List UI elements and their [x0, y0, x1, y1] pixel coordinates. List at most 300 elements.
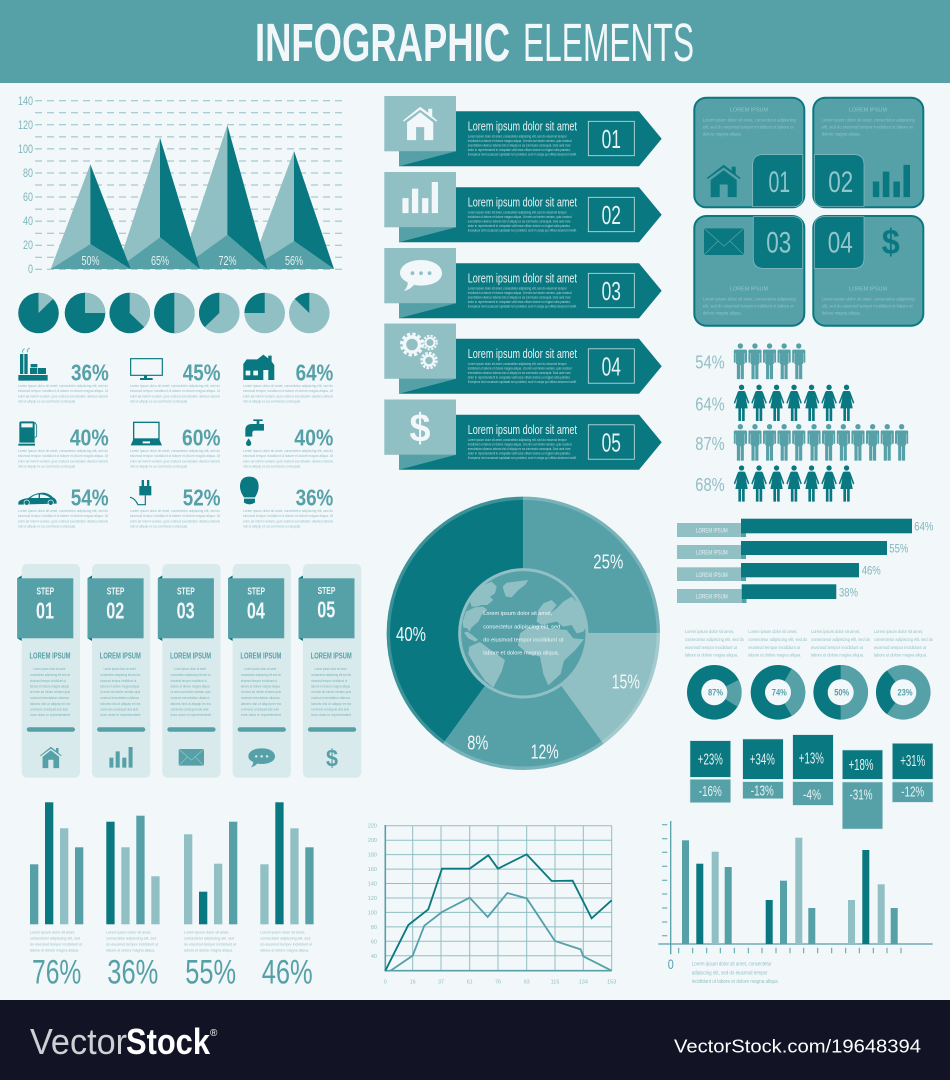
footer logo: Vector: [30, 1021, 127, 1062]
tile 04: 04: [828, 227, 853, 260]
donut captions: Lorem ipsum dolor sit amet,: [811, 629, 860, 634]
bar group 76%: consectetur adipiscing elit, sed: [30, 935, 80, 940]
icon: speech bubble: [400, 260, 442, 291]
icon: bars: [873, 165, 910, 197]
box column 3: +13%: [799, 751, 824, 768]
step card 03: ut enim ad minim veniam quis: [171, 690, 211, 694]
icon: bars: [402, 182, 438, 213]
icon: monitor: [131, 359, 162, 380]
row 64% women: 64%: [695, 393, 725, 414]
plus minus boxes: [690, 735, 933, 829]
stat 52%: [130, 485, 220, 528]
banner 01: exercitation ullamco laboris nisi ut aliquip ex ea commodo consequat. Duis aute irure: [468, 144, 571, 148]
chart caption: adipiscing elit, sed do eiusmod tempor: [692, 970, 768, 976]
box column 4: [842, 750, 883, 829]
step card 05: eiusmod tempor incididunt ut: [311, 679, 347, 683]
footer logo: Stock: [126, 1021, 211, 1062]
banner 03: dolor in reprehenderit in voluptate velit esse cillum dolore eu fugiat nulla pariatur.: [468, 300, 571, 304]
bar 55%: [677, 541, 909, 559]
footer image id: VectorStock.com/19648394: [674, 1035, 921, 1056]
tile 02: dolore magna aliqua.: [822, 132, 861, 137]
globe text: consectetur adipiscing elit, sed: [483, 624, 560, 630]
bar group 76%: 76%: [32, 954, 81, 992]
y axis values: [368, 824, 377, 960]
x axis values: 134: [579, 979, 588, 985]
stat 40%: 40%: [70, 425, 109, 451]
tile 02: LOREM IPSUM: [849, 108, 887, 114]
x axis values: 76: [495, 979, 501, 985]
banner 03: Excepteur sint occaecat cupidatat non proident, sunt in culpa qui officia deserunt mollit.: [468, 304, 577, 308]
row 87% men: [695, 424, 908, 461]
stat 40% tap: Lorem ipsum dolor sit amet, consectetur adipiscing elit, sed do: [243, 449, 333, 453]
stat 64%: 64%: [296, 360, 333, 386]
banner 03: Lorem ipsum dolor sit amet, consectetur adipiscing elit, sed do eiusmod tempor: [468, 286, 567, 290]
step card 03: laboris nisi ut aliquip ex ea: [171, 702, 211, 706]
step card 04: commodo consequat duis aute: [241, 708, 279, 712]
pyramid 4: [250, 151, 334, 269]
step card 03: STEP: [177, 587, 195, 598]
banner 03: Lorem ipsum dolor sit amet: [468, 271, 577, 285]
tile 03: elit, sed do eiusmod tempor incididunt ut labore et: [703, 304, 794, 308]
pyramid 3: [180, 125, 267, 269]
donut captions: consectetur adipiscing elit, sed do: [685, 637, 744, 642]
tile 04: dolore magna aliqua.: [822, 310, 861, 316]
donut captions: labore et dolore magna aliqua.: [874, 653, 927, 658]
donut charts with captions: [685, 629, 933, 720]
donut captions: Lorem ipsum dolor sit amet,: [874, 629, 923, 634]
stat 36% bulb: [243, 485, 333, 528]
tile 04: elit, sed do eiusmod tempor incididunt ut labore et: [822, 304, 913, 308]
step card 03: Lorem ipsum dolor sit amet: [174, 667, 206, 671]
icon: bars: [109, 747, 133, 768]
bar group 36%: 36%: [107, 954, 158, 992]
step card 03: eiusmod tempor incididunt ut: [171, 679, 207, 683]
row 54% men: [695, 343, 805, 379]
icon: house with windows: [243, 355, 274, 380]
stat 45%: enim ad minim veniam, quis nostrud exercitation ullamco laboris: [130, 394, 220, 398]
pie 1: [18, 293, 59, 333]
banner 01: dolor in reprehenderit in voluptate velit esse cillum dolore eu fugiat nulla pariatur.: [468, 148, 571, 152]
zero label: 0: [668, 956, 674, 972]
row 54% men: 54%: [695, 351, 725, 372]
bar 64%: [677, 519, 934, 537]
stat 52%: 52%: [183, 485, 220, 511]
y axis labels: 0: [28, 262, 33, 276]
banner 05: Lorem ipsum dolor sit amet: [468, 423, 577, 437]
line chart: [368, 824, 616, 985]
step card 02: laboris nisi ut aliquip ex ea: [100, 702, 141, 706]
banner 05: Lorem ipsum dolor sit amet, consectetur adipiscing elit, sed do eiusmod tempor: [468, 438, 567, 442]
step card 02: eiusmod tempor incididunt ut: [100, 679, 136, 683]
step card 01: LOREM IPSUM: [30, 651, 70, 661]
donut captions: consectetur adipiscing elit, sed do: [748, 637, 808, 642]
y axis values: 160: [368, 867, 377, 873]
pie percentages: 25%: [593, 551, 623, 573]
stat 40%: eiusmod tempor incididunt ut labore et dolore magna aliqua. Ut: [18, 454, 108, 458]
stat 64%: [243, 360, 333, 404]
x axis values: 153: [607, 979, 616, 985]
donut captions: eiusmod tempor incididunt ut: [685, 645, 738, 650]
bar 38%: [677, 584, 858, 603]
step card 01: irure dolor in reprehenderit: [30, 713, 70, 717]
row 87% men: 87%: [695, 433, 725, 454]
x axis values: [384, 979, 616, 985]
banner 04: [384, 324, 662, 394]
box column 2: -13%: [751, 782, 774, 799]
step card 04: labore et dolore magna aliqua: [241, 684, 280, 688]
pyramid chart: [18, 94, 345, 276]
globe text: Lorem ipsum dolor sit amet,: [483, 611, 553, 617]
donut 50%: [813, 665, 868, 720]
tile 03: LOREM IPSUM: [730, 287, 768, 293]
footer logo: [30, 1021, 218, 1062]
banner 01: Lorem ipsum dolor sit amet, consectetur adipiscing elit, sed do eiusmod tempor: [468, 134, 567, 138]
stat 45%: nisi ut aliquip ex ea commodo consequat.: [130, 400, 188, 404]
step card 02: ut enim ad minim veniam quis: [100, 690, 141, 694]
stat 45%: 45%: [183, 360, 220, 386]
y axis values: 200: [368, 838, 377, 844]
step cards: [17, 564, 361, 778]
step card 05: consectetur adipiscing elit sed do: [311, 673, 351, 677]
step card 01: commodo consequat duis aute: [30, 708, 68, 712]
bar group 55%: 55%: [185, 954, 236, 992]
step card 01: labore et dolore magna aliqua: [30, 684, 69, 688]
bars first group: [682, 840, 732, 944]
banner 02: Lorem ipsum dolor sit amet: [468, 195, 577, 209]
banner 01: 01: [602, 124, 621, 154]
title: INFOGRAPHIC: [255, 13, 510, 73]
step card 01: nostrud exercitation ullamco: [30, 696, 69, 700]
banner 02: incididunt ut labore et dolore magna aliqua. Ut enim ad minim veniam, quis nostrud: [468, 215, 572, 219]
horizontal ribbon bars: [677, 519, 934, 603]
bar group 46%: consectetur adipiscing elit, sed: [260, 935, 310, 940]
step card 04: eiusmod tempor incididunt ut: [241, 679, 277, 683]
bar group 55%: labore et dolore magna aliqua.: [184, 948, 233, 953]
bar group 76%: Lorem ipsum dolor sit amet,: [30, 929, 75, 934]
step card 04: ut enim ad minim veniam quis: [241, 690, 281, 694]
stat 52%: eiusmod tempor incididunt ut labore et dolore magna aliqua. Ut: [130, 514, 220, 518]
step card 04: irure dolor in reprehenderit: [241, 713, 281, 717]
box column 3: -4%: [803, 786, 821, 803]
chart caption: Lorem ipsum dolor sit amet, consectetur: [692, 962, 772, 968]
stat 52%: enim ad minim veniam, quis nostrud exercitation ullamco laboris: [130, 520, 220, 524]
tile 01: [694, 98, 804, 207]
bars second group: [766, 838, 815, 944]
icon: laptop: [131, 422, 162, 445]
step card 05: [298, 564, 361, 778]
donut captions: consectetur adipiscing elit, sed do: [811, 637, 870, 642]
bar group 76%: [30, 802, 83, 992]
stat 36%: enim ad minim veniam, quis nostrud exercitation ullamco laboris: [18, 394, 108, 398]
stat 45%: [130, 360, 220, 404]
icon: factory: [18, 348, 48, 381]
step card 05: laboris nisi ut aliquip ex ea: [311, 702, 351, 706]
y axis values: 40: [371, 954, 377, 960]
donut captions: Lorem ipsum dolor sit amet,: [748, 629, 797, 634]
pyramid 1: [51, 164, 131, 269]
step card 01: STEP: [36, 587, 54, 598]
box column 5: +31%: [900, 753, 925, 770]
y axis labels: 120: [18, 118, 33, 132]
tile 03: Lorem ipsum dolor sit amet, consectetur adipiscing: [703, 296, 796, 302]
bar 64%: 64%: [914, 519, 934, 533]
x axis values: 93: [524, 979, 530, 985]
pyramid percentages: 72%: [218, 254, 236, 268]
banner 03: exercitation ullamco laboris nisi ut aliquip ex ea commodo consequat. Duis aute irure: [468, 296, 571, 300]
tile 02: Lorem ipsum dolor sit amet, consectetur adipiscing: [822, 118, 915, 122]
stat 40%: [18, 425, 109, 468]
banner 05: Excepteur sint occaecat cupidatat non proident, sunt in culpa qui officia deserunt mollit.: [468, 456, 577, 460]
rounded tiles: [694, 98, 923, 326]
tile 04: Lorem ipsum dolor sit amet, consectetur adipiscing: [822, 296, 915, 302]
pyramid percentages: 56%: [285, 254, 303, 268]
banner 01: [384, 96, 662, 166]
donut captions: [685, 629, 933, 658]
icon: speech bubble: [248, 748, 275, 767]
banner 01: Excepteur sint occaecat cupidatat non proident, sunt in culpa qui officia deserunt mollit.: [468, 152, 577, 156]
bar group 46%: do eiusmod tempor incididunt ut: [260, 941, 313, 946]
donut captions: eiusmod tempor incididunt ut: [874, 645, 927, 650]
step card 05: nostrud exercitation ullamco: [311, 696, 350, 700]
tile 04: LOREM IPSUM: [849, 287, 887, 293]
icon: house: [40, 747, 62, 768]
right bar chart: [658, 821, 933, 985]
stat 54%: eiusmod tempor incididunt ut labore et dolore magna aliqua. Ut: [18, 514, 108, 518]
pyramid percentages: 65%: [151, 254, 169, 268]
step card 04: LOREM IPSUM: [240, 651, 281, 661]
y axis values: 220: [368, 824, 377, 830]
donut 74%: [751, 665, 805, 720]
banner 02: Excepteur sint occaecat cupidatat non proident, sunt in culpa qui officia deserunt mollit.: [468, 228, 577, 232]
x axis values: 61: [467, 979, 473, 985]
box column 5: -12%: [901, 783, 924, 800]
segment 15%: [523, 633, 660, 744]
row 68% women: [695, 465, 854, 502]
stat 36% bulb: 36%: [296, 485, 333, 511]
banner 05: exercitation ullamco laboris nisi ut aliquip ex ea commodo consequat. Duis aute irure: [468, 447, 571, 451]
y axis values: 180: [368, 853, 377, 859]
stat 64%: nisi ut aliquip ex ea commodo consequat.: [243, 400, 301, 404]
step card 01: laboris nisi ut aliquip ex ea: [30, 702, 70, 706]
chart caption: [692, 962, 778, 985]
stat 40% tap: enim ad minim veniam, quis nostrud exercitation ullamco laboris: [243, 460, 333, 464]
stat 40%: Lorem ipsum dolor sit amet, consectetur adipiscing elit, sed do: [18, 449, 108, 453]
stat 60%: enim ad minim veniam, quis nostrud exercitation ullamco laboris: [130, 460, 220, 464]
step card 01: 01: [36, 597, 54, 623]
row 64% women: [695, 385, 854, 421]
step card 02: nostrud exercitation ullamco: [100, 696, 140, 700]
pie 6: [244, 293, 285, 333]
y axis values: 100: [368, 910, 377, 916]
pyramid percentages: 50%: [82, 254, 100, 268]
title: ELEMENTS: [523, 13, 694, 73]
step card 02: commodo consequat duis aute: [100, 708, 138, 712]
step card 05: LOREM IPSUM: [311, 651, 352, 661]
stat 54%: [18, 485, 109, 528]
pie percentages: 40%: [396, 624, 426, 646]
step card 03: LOREM IPSUM: [170, 651, 211, 661]
bar group 46%: 46%: [262, 954, 313, 992]
bar group 46%: labore et dolore magna aliqua.: [260, 948, 309, 953]
stat 36%: 36%: [71, 360, 109, 386]
stat 45%: Lorem ipsum dolor sit amet, consectetur adipiscing elit, sed do: [130, 384, 220, 388]
banner 03: incididunt ut labore et dolore magna aliqua. Ut enim ad minim veniam, quis nostrud: [468, 291, 572, 295]
stat 52%: nisi ut aliquip ex ea commodo consequat.: [130, 524, 188, 528]
donut captions: consectetur adipiscing elit, sed do: [874, 637, 933, 642]
tile 01: Lorem ipsum dolor sit amet, consectetur adipiscing: [703, 118, 796, 122]
bar group 36%: labore et dolore magna aliqua.: [106, 948, 155, 953]
bar group 55%: consectetur adipiscing elit, sed: [184, 935, 234, 940]
mid series line: [391, 893, 612, 971]
stat 54%: Lorem ipsum dolor sit amet, consectetur adipiscing elit, sed do: [18, 509, 108, 513]
stat 45%: eiusmod tempor incididunt ut labore et dolore magna aliqua. Ut: [130, 389, 220, 393]
header banner: [0, 0, 950, 83]
bar 55%: LOREM IPSUM: [696, 551, 728, 557]
stat 54%: enim ad minim veniam, quis nostrud exercitation ullamco laboris: [18, 520, 108, 524]
tile 02: elit, sed do eiusmod tempor incididunt ut labore et: [822, 125, 913, 130]
bars third group: [848, 850, 898, 944]
step card 02: labore et dolore magna aliqua: [100, 684, 139, 688]
icon: fuel pump: [18, 421, 37, 446]
step card 03: labore et dolore magna aliqua: [171, 684, 210, 688]
pie percentages: 12%: [531, 742, 559, 764]
tile 02: 02: [828, 166, 853, 199]
tile 01: dolore magna aliqua.: [703, 132, 742, 137]
step card 05: STEP: [318, 586, 336, 597]
footer bar: [0, 1000, 950, 1080]
tile 03: 03: [766, 227, 791, 260]
step card 05: commodo consequat duis aute: [311, 708, 349, 712]
bar group 55%: do eiusmod tempor incididunt ut: [184, 941, 237, 946]
box column 1: [690, 741, 731, 803]
banner 04: dolor in reprehenderit in voluptate velit esse cillum dolore eu fugiat nulla pariatur.: [468, 376, 571, 380]
icon statistics grid: [18, 348, 333, 528]
donut 87%: [687, 665, 742, 720]
step card 05: labore et dolore magna aliqua: [311, 684, 350, 688]
banner 02: [384, 172, 662, 242]
stat 36%: nisi ut aliquip ex ea commodo consequat.: [18, 400, 76, 404]
stat 36% bulb: Lorem ipsum dolor sit amet, consectetur adipiscing elit, sed do: [243, 509, 333, 513]
pie chart row: [18, 293, 330, 333]
stat 40%: nisi ut aliquip ex ea commodo consequat.: [18, 464, 76, 468]
stat 40%: enim ad minim veniam, quis nostrud exercitation ullamco laboris: [18, 460, 108, 464]
stat 40% tap: eiusmod tempor incididunt ut labore et dolore magna aliqua. Ut: [243, 454, 333, 458]
y axis values: 80: [371, 925, 377, 931]
box column 1: -16%: [699, 783, 722, 800]
banner 03: 03: [602, 276, 621, 306]
donut 23%: 23%: [898, 688, 912, 698]
pie 4: [154, 293, 195, 333]
tile 03: [694, 216, 804, 326]
bar 55%: 55%: [889, 541, 909, 555]
donut 74%: 74%: [772, 688, 787, 698]
step card 02: [88, 564, 150, 778]
donut 50%: 50%: [834, 688, 849, 698]
globe text: [483, 611, 564, 657]
box column 5: [892, 743, 933, 802]
bar group 55%: Lorem ipsum dolor sit amet,: [184, 929, 229, 934]
banner 04: incididunt ut labore et dolore magna aliqua. Ut enim ad minim veniam, quis nostrud: [468, 366, 572, 370]
y axis labels: 80: [23, 166, 33, 180]
box column 4: -31%: [850, 786, 872, 803]
donut 23%: [876, 665, 931, 720]
stat 40% tap: [243, 425, 333, 468]
stat 64%: eiusmod tempor incididunt ut labore et dolore magna aliqua. Ut: [243, 389, 333, 393]
pie percentages: [396, 551, 640, 764]
dark series line: [385, 854, 612, 971]
tile 01: elit, sed do eiusmod tempor incididunt ut labore et: [703, 125, 794, 130]
banner 04: Lorem ipsum dolor sit amet, consectetur adipiscing elit, sed do eiusmod tempor: [468, 362, 567, 366]
step card 03: commodo consequat duis aute: [171, 708, 209, 712]
step card 01: [17, 564, 80, 778]
x axis values: 16: [410, 979, 416, 985]
segment 25%: [523, 497, 660, 633]
y axis labels: 40: [23, 214, 33, 228]
icon: house: [707, 165, 741, 197]
donut captions: eiusmod tempor incididunt ut: [748, 645, 801, 650]
bar 46%: LOREM IPSUM: [696, 573, 728, 579]
step card 02: LOREM IPSUM: [100, 651, 141, 661]
step card 04: 04: [247, 597, 265, 623]
segment 40%: [387, 497, 523, 744]
box column 4: +18%: [848, 757, 874, 774]
y axis labels: 140: [18, 94, 33, 108]
bar 64%: LOREM IPSUM: [696, 529, 728, 535]
banner 05: 05: [602, 428, 621, 458]
bar group 36%: Lorem ipsum dolor sit amet,: [106, 929, 151, 934]
pie percentages: 8%: [467, 732, 488, 754]
donut 87%: 87%: [708, 688, 723, 698]
step card 01: consectetur adipiscing elit sed do: [30, 673, 70, 677]
icon: envelope: [704, 228, 744, 255]
step card 04: STEP: [247, 587, 265, 598]
x axis values: 0: [384, 979, 387, 985]
stat 36%: [18, 360, 109, 404]
x axis values: 37: [438, 979, 444, 985]
stat 60%: Lorem ipsum dolor sit amet, consectetur adipiscing elit, sed do: [130, 449, 220, 453]
pie percentages: 15%: [612, 671, 640, 693]
step card 05: ut enim ad minim veniam quis: [311, 690, 352, 694]
x axis values: 115: [551, 979, 559, 985]
stat 60%: 60%: [182, 425, 220, 451]
y axis labels: [18, 94, 33, 276]
step card 04: [228, 564, 291, 778]
banner 02: dolor in reprehenderit in voluptate velit esse cillum dolore eu fugiat nulla pariatur.: [468, 224, 571, 228]
globe text: labore et dolore magna aliqua.: [483, 651, 559, 657]
step card 03: nostrud exercitation ullamco: [171, 696, 210, 700]
step card 04: Lorem ipsum dolor sit amet: [244, 667, 276, 671]
icon: house: [403, 107, 437, 140]
banner 02: exercitation ullamco laboris nisi ut aliquip ex ea commodo consequat. Duis aute irure: [468, 220, 571, 224]
y axis labels: 100: [18, 142, 33, 156]
y axis values: 60: [371, 939, 377, 945]
bar group 76%: labore et dolore magna aliqua.: [30, 948, 79, 953]
tile 01: 01: [768, 166, 790, 199]
bar group 46%: [260, 802, 314, 992]
bar 38%: 38%: [839, 586, 858, 600]
step card 04: nostrud exercitation ullamco: [241, 696, 280, 700]
bar 46%: 46%: [862, 564, 881, 578]
stat 40% tap: nisi ut aliquip ex ea commodo consequat.: [243, 464, 301, 468]
footer logo: ®: [210, 1028, 218, 1039]
bar 38%: LOREM IPSUM: [696, 595, 728, 601]
step card 02: 02: [106, 597, 124, 623]
banner 04: exercitation ullamco laboris nisi ut aliquip ex ea commodo consequat. Duis aute irure: [468, 371, 571, 375]
pie 5: [199, 293, 240, 333]
chart caption: incididunt ut labore et dolore magna aliqua: [692, 979, 778, 985]
banner 01: incididunt ut labore et dolore magna aliqua. Ut enim ad minim veniam, quis nostrud: [468, 139, 572, 143]
icon: gears: [402, 334, 437, 368]
